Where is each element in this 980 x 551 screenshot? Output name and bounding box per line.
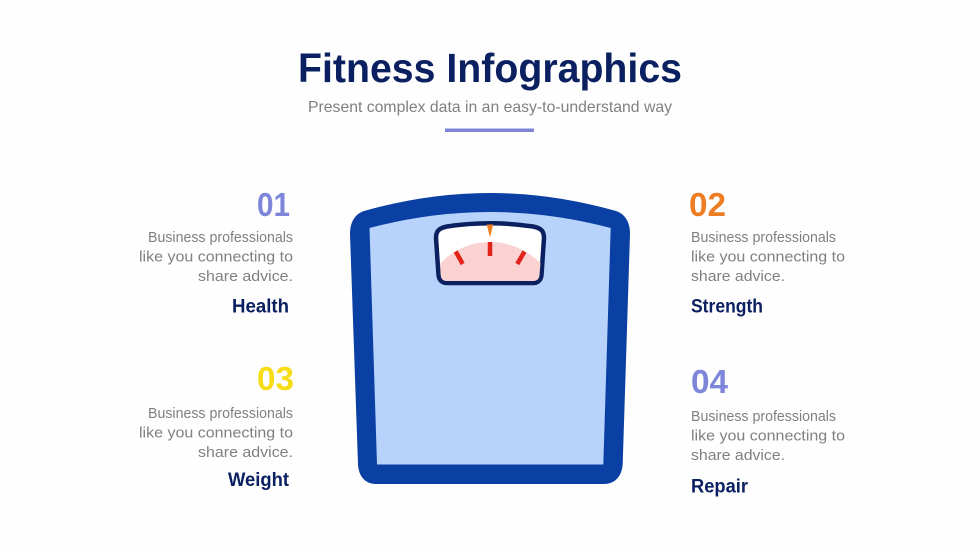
number 02: 02 [689, 186, 726, 223]
description 04 [691, 408, 845, 464]
dial [436, 223, 544, 283]
description 01: share advice. [198, 268, 293, 285]
panel: 04 repair [691, 363, 845, 498]
dial pointer [487, 224, 493, 238]
panel: 01 health [139, 186, 293, 318]
description 03: Business professionals [148, 405, 293, 422]
title underline [445, 128, 534, 132]
description 04: like you connecting to [691, 428, 845, 444]
description 01: like you connecting to [139, 248, 293, 266]
description 02 [691, 229, 845, 285]
subtitle: Present complex data in an easy-to-understand way [308, 99, 672, 116]
label repair: Repair [691, 476, 749, 498]
label weight: Weight [228, 470, 290, 491]
panel: 02 strength [689, 186, 845, 318]
label health: Health [232, 296, 289, 318]
dial face [436, 223, 544, 283]
description 02: like you connecting to [691, 248, 845, 266]
description 01 [139, 229, 293, 285]
dial pink zone [440, 242, 540, 281]
description 02: Business professionals [691, 229, 836, 246]
description 03: share advice. [198, 444, 293, 461]
number 03: 03 [257, 360, 294, 397]
description 04: Business professionals [691, 408, 836, 425]
icon: bathroom scale [350, 193, 630, 484]
number 01: 01 [257, 186, 290, 223]
panel: 03 weight [139, 360, 294, 491]
scale body [350, 193, 630, 484]
description 02: share advice. [691, 268, 785, 285]
title: Fitness Infographics [298, 45, 682, 91]
header [298, 45, 682, 132]
description 03: like you connecting to [139, 424, 293, 442]
scale platform [370, 212, 611, 464]
dial ticks [456, 242, 524, 264]
description 01: Business professionals [148, 229, 293, 246]
description 04: share advice. [691, 447, 785, 464]
label strength: Strength [691, 296, 763, 318]
number 04: 04 [691, 363, 729, 400]
description 03 [139, 405, 293, 461]
